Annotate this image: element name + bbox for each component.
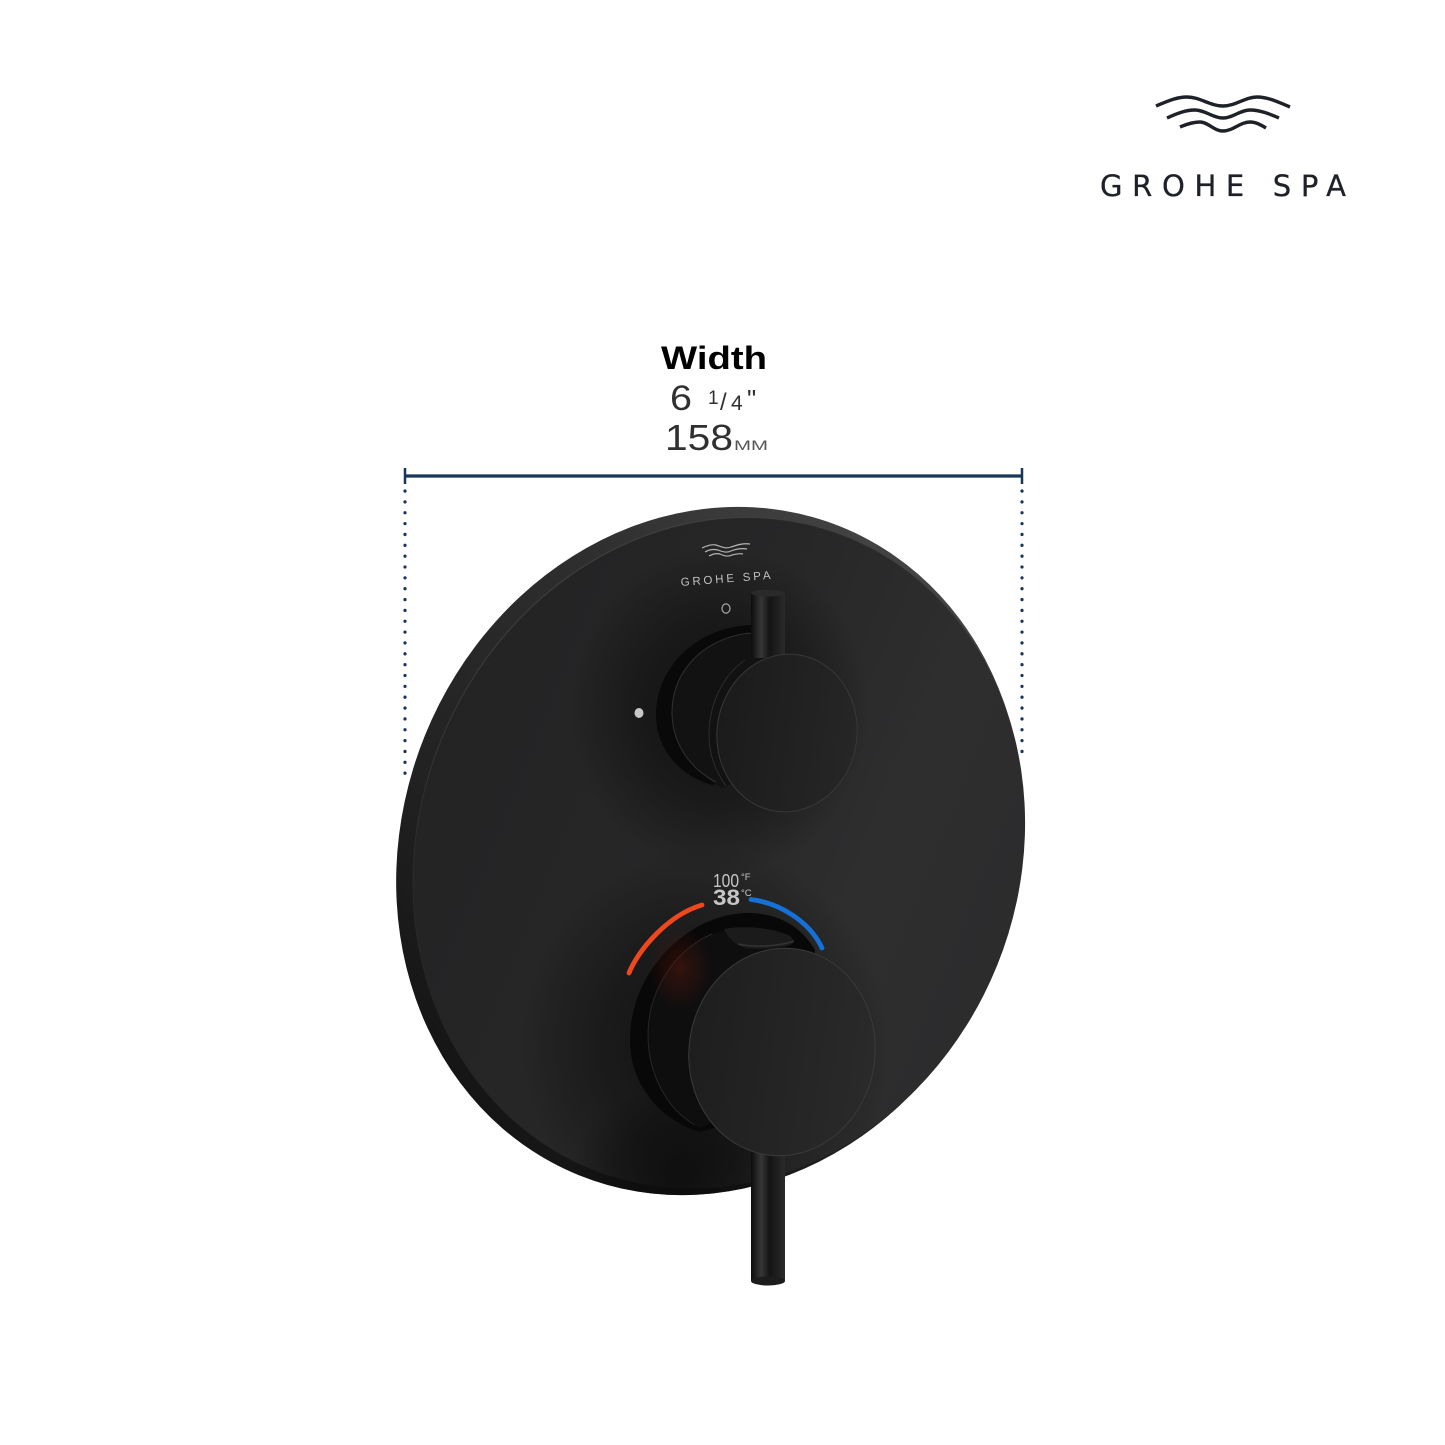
inches value: 1 [708, 388, 719, 409]
icon: plate waves [702, 544, 750, 556]
inches value: 6 [670, 379, 692, 418]
icon: logo waves [1156, 97, 1290, 131]
plate wordmark: GROHE SPA [680, 570, 771, 589]
plate face [313, 424, 1125, 1282]
heading: Width: Width [661, 340, 767, 376]
millimetres value: 158 [665, 417, 733, 458]
red reflection [648, 926, 712, 1010]
temperature readout: 100 [713, 871, 739, 891]
lower knob base [630, 913, 815, 1132]
temperature scale [629, 871, 822, 973]
millimetre unit: MM [734, 437, 768, 453]
lower temperature knob [630, 913, 889, 1286]
hot arc [629, 905, 702, 973]
plate rim [294, 412, 1126, 1290]
lower knob tab [724, 927, 793, 949]
lower knob face [675, 936, 889, 1168]
upper knob face [707, 645, 867, 821]
inches value: / [720, 389, 727, 416]
upper knob base [656, 625, 765, 785]
icon: marker dot [634, 708, 644, 718]
shadows around knobs [572, 591, 835, 1196]
plate logo [680, 544, 771, 589]
icon: off marker ring [722, 604, 730, 613]
upper lever [751, 590, 785, 658]
valve trim product [396, 506, 1026, 1286]
inches value: " [747, 384, 756, 414]
logo: Grohe Spa [1100, 97, 1346, 203]
inches value: 4 [731, 392, 743, 415]
temperature readout: °C [741, 888, 752, 899]
logo wordmark: GROHE SPA [1100, 169, 1346, 203]
upper diverter knob [656, 590, 867, 821]
temperature readout: 38 [713, 885, 740, 910]
temperature readout: °F [741, 872, 751, 883]
lower lever [751, 1150, 785, 1286]
dimension label [661, 340, 768, 458]
temperature readout [713, 871, 752, 910]
inches value [670, 379, 756, 418]
dimension line [405, 468, 1022, 775]
cold arc [751, 900, 822, 948]
